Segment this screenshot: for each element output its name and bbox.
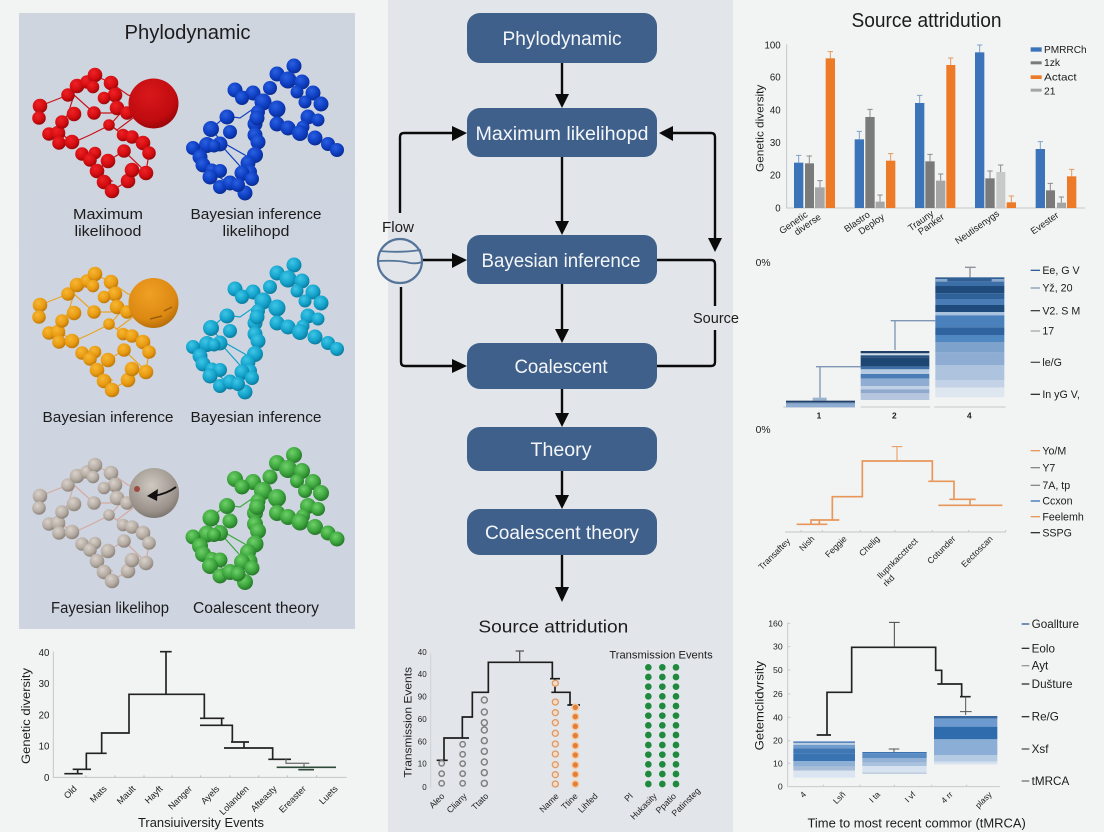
flow box: Theory: Theory: [530, 440, 592, 461]
chart: transmission events step tree, bottom left: 30: [39, 679, 49, 690]
molecule: teal: [186, 258, 344, 399]
chart: grouped bars, top right: Panker: [916, 212, 946, 237]
panel: flow diagram: [378, 0, 739, 832]
bar 2 stripes: [861, 351, 929, 400]
bars: blue series: [794, 52, 1045, 208]
chart: tMRCA boxes and step tree, bottom right: 4: [798, 789, 808, 800]
chart: transmission events step tree, bottom left: 20: [39, 711, 49, 722]
legend: tMRCA: Dušture: [1032, 678, 1072, 691]
chart: transmission events step tree, bottom left: Transiuiversity Events: [138, 816, 264, 830]
chart: transmission events step tree, bottom left: Lolanden: [218, 784, 251, 817]
chart: grouped bars, top right: Neutisenygs: [953, 208, 1001, 246]
legend: tMRCA: tMRCA: [1032, 775, 1069, 788]
chart: tMRCA boxes and step tree, bottom right: 0: [778, 782, 783, 792]
chart: transmission events step tree, bottom left: Genetic diversity: [19, 668, 33, 764]
chart: tMRCA boxes and step tree, bottom right: Getemclidvrsity: [753, 661, 766, 750]
box 3 stripes: [934, 716, 997, 764]
box 2 stripes: [862, 752, 927, 774]
chart: tMRCA boxes and step tree, bottom right: [753, 618, 1079, 830]
chart: stacked stripe bars, middle right: 2: [892, 410, 897, 420]
flow box: Phylodynamic: [467, 13, 657, 63]
molecule: grey with large sphere and arrow: [32, 458, 179, 588]
chart: source attribution tree and dots, bottom centre: [403, 616, 713, 822]
chart: source attribution tree and dots, bottom centre: Name: [537, 791, 561, 814]
chart: grouped bars, top right: Genetic: [777, 209, 810, 236]
chart: transmission events step tree, bottom left: Mats: [88, 783, 109, 805]
chart: stacked stripe bars, middle right: Cotunder: [925, 534, 957, 566]
legend: tMRCA: [1022, 618, 1079, 788]
arrows: left feedback routes from Flow: [400, 126, 467, 373]
legend: orange tree: Yo/M: [1042, 445, 1066, 457]
box 1 stripes: [793, 741, 855, 778]
label: Coalescent theory: Coalescent theory: [193, 600, 319, 617]
chart: stacked stripe bars, middle right: Chelig: [857, 534, 882, 558]
flow box: Phylodynamic: Phylodynamic: [502, 29, 622, 50]
legend: stripe bars: V2. S M: [1042, 305, 1080, 317]
"0%" label: 0%: [756, 425, 771, 436]
heading: Phylodynamic: Phylodynamic: [124, 22, 250, 44]
chart: stacked stripe bars, middle right: 4: [967, 410, 972, 420]
icon: flow circle: [378, 239, 422, 283]
label: Flow: Flow: [382, 219, 414, 236]
chart: tMRCA boxes and step tree, bottom right: 26: [773, 689, 783, 699]
label: Fayesian likelihop: Fayesian likelihop: [51, 600, 169, 617]
chart: stacked stripe bars, middle right: 0%: [756, 258, 771, 269]
chart: tMRCA boxes and step tree, bottom right: 30: [773, 642, 783, 652]
chart: source attribution tree and dots, bottom centre: Cliany: [445, 791, 469, 815]
legend: orange tree: 7A, tp: [1042, 480, 1070, 492]
chart: stacked stripe bars, middle right: Nish: [797, 534, 817, 553]
chart: source attribution tree and dots, bottom centre: Aleo: [427, 791, 447, 810]
chart: grouped bars, top right: Deploy: [857, 212, 886, 237]
chart: stacked stripe bars, middle right: Ilupnkacctrect: [875, 536, 920, 581]
chart: grouped bars, top right: diverse: [792, 212, 823, 237]
panel: molecular structures: [19, 13, 355, 629]
heading: Source attridution: Source attridution: [478, 616, 628, 636]
chart: stacked stripe bars, middle right: rkd: [881, 573, 897, 588]
bars: dark grey series: [805, 117, 1055, 208]
chart: source attribution tree and dots, bottom centre: 60: [418, 715, 427, 724]
flow box: Coalescent: Coalescent: [514, 357, 608, 378]
bars: light grey series: [815, 172, 1066, 208]
chart: tMRCA boxes and step tree, bottom right: 4 rr: [939, 789, 955, 805]
molecule: orange with large sphere: [32, 267, 178, 397]
legend: orange tree: [1031, 445, 1084, 539]
molecule: red with large sphere: [32, 68, 178, 198]
chart: tMRCA boxes and step tree, bottom right: 160: [768, 618, 783, 628]
chart: grouped bars, top right: Blastro: [842, 209, 872, 234]
legend: orange tree: Y7: [1042, 462, 1055, 474]
chart: stacked stripe bars, middle right: 1: [817, 410, 822, 420]
label: Maximum likelihood: [73, 206, 143, 240]
chart: source attribution tree and dots, bottom centre: 0: [422, 783, 427, 792]
chart: tMRCA boxes and step tree, bottom right: 10: [773, 758, 783, 768]
label: Bayesian inference likelihopd: likelihopd: [222, 223, 290, 240]
chart: stacked stripe bars, middle right: Eectoscan: [959, 534, 995, 569]
chart: transmission events step tree, bottom left: Nanger: [166, 784, 194, 812]
chart: grouped bars, top right: [754, 40, 1087, 246]
molecule: green: [186, 448, 344, 589]
arrows: right feedback routes and Source loop: [657, 126, 722, 366]
legend: stripe bars: In yG V,: [1042, 389, 1080, 401]
chart: source attribution tree and dots, bottom centre: Transmission Events: [403, 667, 415, 778]
flow box: Coalescent theory: Coalescent theory: [485, 523, 639, 544]
label: Maximum likelihood: likelihood: [74, 223, 142, 240]
chart: source attribution tree and dots, bottom centre: 40: [418, 670, 427, 679]
chart: grouped bars, top right: 40: [770, 105, 781, 116]
label: Maximum likelihood: Maximum: [73, 206, 143, 223]
legend: stripe bars: le/G: [1042, 357, 1062, 369]
chart: tMRCA boxes and step tree, bottom right: 20: [773, 736, 783, 746]
chart: source attribution tree and dots, bottom centre: 10: [418, 760, 427, 769]
chart: source attribution tree and dots, bottom centre: Patinsteg: [669, 786, 702, 818]
legend: bar series: 1zk: [1044, 58, 1061, 69]
chart: source attribution tree and dots, bottom centre: Ttato: [469, 791, 491, 812]
chart: source attribution tree and dots, bottom centre: Pl: [622, 791, 635, 804]
label: Source: Source: [693, 310, 739, 327]
bar 1 stripes: [786, 398, 855, 407]
chart: orange step tree: [797, 447, 1002, 524]
legend: stripe bars: Ee, G V: [1042, 265, 1081, 277]
chart: grouped bars, top right: 60: [770, 73, 781, 84]
chart: transmission events step tree, bottom left: 40: [39, 648, 49, 659]
chart: tMRCA boxes and step tree, bottom right: 40: [773, 712, 783, 722]
molecule: blue: [186, 59, 344, 200]
chart: source attribution tree and dots, bottom centre: 40: [418, 648, 427, 657]
chart: transmission events step tree, bottom left: 10: [39, 742, 49, 753]
chart: stacked stripe bars, middle right: Transaftey: [756, 536, 793, 572]
label: Transmission Events: Transmission Events: [609, 649, 713, 661]
legend: stripe bars: 17: [1042, 326, 1054, 338]
flow box: Theory: [467, 427, 657, 471]
chart: source attribution tree and dots, bottom centre: 90: [418, 692, 427, 701]
label: Bayesian inference likelihopd: [190, 206, 322, 240]
legend: bar series: PMRRCh: [1044, 45, 1087, 56]
chart: source attribution tree and dots, bottom centre: 60: [418, 737, 427, 746]
chart: source attribution tree and dots, bottom centre: Ttine: [559, 791, 580, 812]
chart: grouped bars, top right: Trauny: [906, 208, 936, 233]
legend: tMRCA: Goallture: [1032, 618, 1079, 631]
chart: grouped bars, top right: 0: [775, 203, 781, 214]
chart: grouped bars, top right: Evester: [1029, 210, 1060, 236]
flow box: Coalescent: [467, 343, 657, 389]
chart: tMRCA boxes and step tree, bottom right: Lsñ: [831, 789, 848, 806]
chart: tMRCA boxes and step tree, bottom right: plasy: [973, 789, 994, 810]
chart: transmission events step tree, bottom left: Ayels: [199, 783, 222, 806]
chart: transmission events step tree, bottom left: Luets: [317, 783, 340, 806]
chart: grouped bars, top right: Genetic diversity: [754, 84, 766, 172]
legend: tMRCA: Eolo: [1032, 642, 1055, 655]
legend: stripe bars: Yž, 20: [1042, 283, 1073, 295]
heading: Source attridution, top right: Source attridution: [852, 10, 1002, 32]
flow box: Bayesian inference: Bayesian inference: [482, 251, 640, 272]
label: Bayesian inference likelihopd: Bayesian inference: [190, 206, 322, 223]
legend: bar series: Actact: [1044, 73, 1077, 84]
arrows: central vertical flow: [555, 63, 569, 602]
flow box: Maximum likelihood: Maximum likelihopd: [476, 124, 648, 145]
chart: grouped bars, top right: 30: [770, 138, 781, 149]
chart: source attribution tree and dots, bottom centre: Hukasity: [628, 791, 659, 822]
legend: bar series: [1031, 45, 1087, 97]
chart: tMRCA boxes and step tree, bottom right: Time to most recent commor (tMRCA): [807, 816, 1026, 830]
flow box: Maximum likelihood: [467, 108, 657, 157]
chart: transmission events step tree, bottom left: Afteasty: [249, 783, 279, 814]
chart: stacked stripe bars, middle right: Feggie: [823, 534, 849, 559]
chart: source attribution tree and dots, bottom centre: Lihfed: [576, 791, 600, 815]
legend: stripe bars: [1031, 265, 1081, 401]
legend: tMRCA: Ayt: [1032, 660, 1049, 673]
label: Bayesian inference right: Bayesian inference: [190, 409, 322, 426]
chart: grouped bars, top right: 20: [770, 171, 781, 182]
chart: transmission events step tree, bottom left: Mault: [115, 783, 138, 806]
legend: bar series: 21: [1044, 86, 1056, 97]
chart: transmission events step tree, bottom left: 0: [44, 773, 49, 784]
bars: orange series: [826, 58, 1076, 208]
chart: grouped bars, top right: 100: [765, 40, 781, 51]
chart: tMRCA boxes and step tree, bottom right: I ta: [867, 789, 882, 805]
chart: transmission events step tree, bottom left: [19, 648, 347, 830]
chart: transmission events step tree, bottom left: Old: [62, 784, 79, 801]
label: Bayesian inference left: Bayesian inference: [42, 409, 174, 426]
chart: transmission events step tree, bottom left: Ereaster: [277, 784, 308, 815]
legend: orange tree: Feelemh: [1042, 511, 1084, 523]
legend: tMRCA: Re/G: [1032, 711, 1059, 724]
legend: tMRCA: Xsf: [1032, 743, 1049, 756]
flow box: Bayesian inference: [467, 235, 657, 284]
bar 3 stripes: [935, 277, 1004, 397]
chart: tMRCA boxes and step tree, bottom right: 50: [773, 665, 783, 675]
legend: orange tree: SSPG: [1042, 527, 1072, 539]
chart: source attribution tree and dots, bottom centre: Ppatio: [654, 791, 678, 815]
legend: orange tree: Ccxon: [1042, 496, 1073, 508]
flow box: Coalescent theory: [467, 509, 657, 555]
chart: tMRCA boxes and step tree, bottom right: I vf: [902, 789, 918, 804]
chart: stacked stripe bars, middle right: [756, 258, 1084, 588]
chart: transmission events step tree, bottom left: Hayft: [143, 783, 165, 806]
